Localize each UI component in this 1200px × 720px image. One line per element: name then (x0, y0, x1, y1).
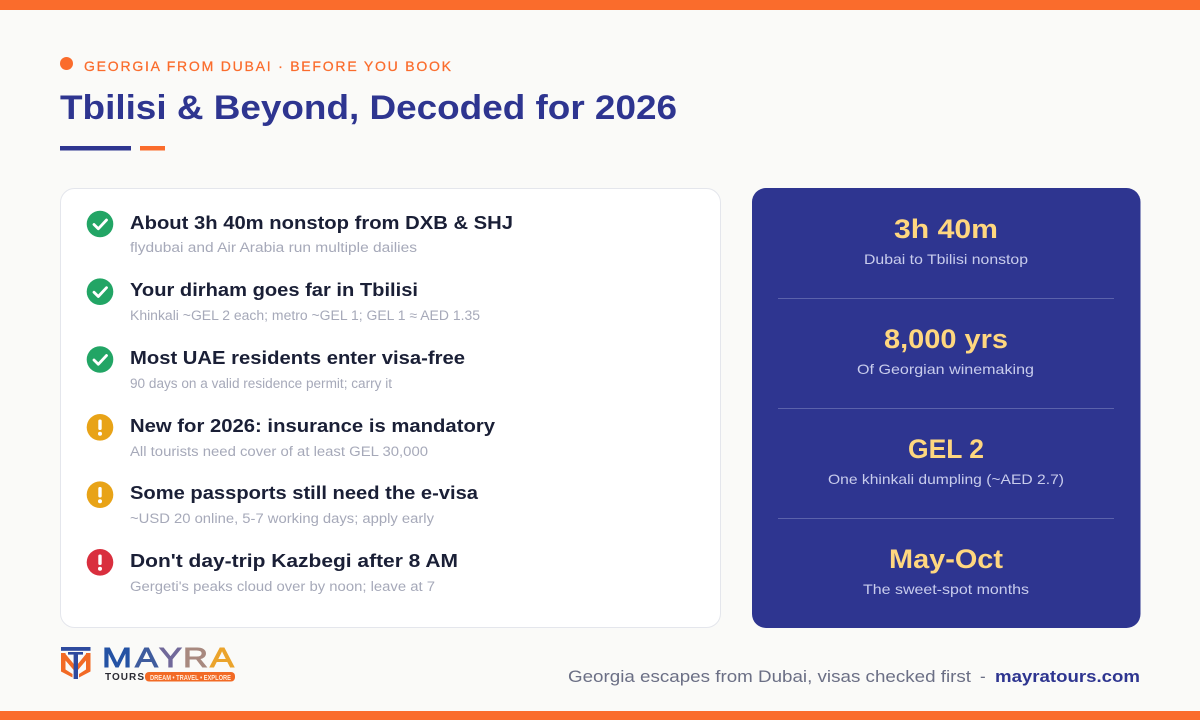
stat: winemaking (857, 324, 1034, 377)
icon: amber warning (87, 481, 113, 508)
logo wordmark: M (102, 642, 132, 673)
footer text: - (980, 667, 986, 686)
stat: best months (863, 544, 1029, 597)
header (60, 57, 677, 150)
footer text (568, 667, 1140, 686)
logo wordmark (102, 642, 234, 673)
item: visa-free: 90 days on a valid residence permit; carry it (130, 376, 392, 391)
item: visa-free (87, 346, 465, 391)
eyebrow dot (60, 57, 73, 70)
stat: flight time: 3h 40m (894, 214, 998, 244)
item: Kazbegi (87, 549, 458, 594)
logo tagline pill: DREAM • TRAVEL • EXPLORE (150, 673, 231, 682)
item: e-visa: Some passports still need the e-visa (130, 482, 479, 503)
item: insurance: All tourists need cover of at least GEL 30,000 (130, 444, 428, 459)
eyebrow text: GEORGIA FROM DUBAI · BEFORE YOU BOOK (84, 58, 452, 74)
stat: winemaking: 8,000 yrs (884, 324, 1008, 354)
title: Tbilisi & Beyond, Decoded for 2026 (60, 89, 677, 127)
stat: khinkali price (828, 434, 1064, 487)
stat: best months: The sweet-spot months (863, 581, 1029, 597)
item: e-visa: ~USD 20 online, 5-7 working days; apply early (130, 511, 434, 526)
stat: flight time: Dubai to Tbilisi nonstop (864, 251, 1028, 267)
footer text: Georgia escapes from Dubai, visas checked first (568, 667, 971, 686)
footer text: mayratours.com (995, 667, 1140, 686)
panel: checklist (60, 188, 720, 628)
stat: khinkali price: One khinkali dumpling (~AED 2.7) (828, 471, 1064, 487)
stat: flight time (864, 214, 1028, 267)
item: flight time: flydubai and Air Arabia run multiple dailies (130, 240, 417, 255)
item: e-visa (87, 481, 479, 526)
logo tours label: TOURS (105, 672, 144, 683)
logo wordmark: A (135, 642, 158, 673)
item: dirham value (87, 278, 480, 323)
bottom accent bar (0, 711, 1200, 720)
icon: green check (87, 346, 113, 373)
logo wordmark: A (210, 642, 234, 673)
icon: green check (87, 211, 113, 237)
item: Kazbegi: Gergeti's peaks cloud over by noon; leave at 7 (130, 579, 435, 594)
logo wordmark: Y (159, 642, 182, 673)
title underline navy (60, 146, 131, 150)
item: visa-free: Most UAE residents enter visa-free (130, 347, 465, 368)
stat: best months: May-Oct (889, 544, 1003, 574)
item: insurance: New for 2026: insurance is mandatory (130, 415, 496, 436)
logo: Mayra Tours (61, 642, 235, 683)
logo wordmark: R (183, 642, 208, 673)
panel: key stats (752, 188, 1140, 628)
icon: red alert (87, 549, 113, 576)
icon: amber warning (87, 414, 113, 441)
item: dirham value: Your dirham goes far in Tbilisi (130, 279, 418, 300)
top accent bar (0, 0, 1200, 10)
panel background (752, 188, 1140, 628)
item: insurance (87, 414, 496, 459)
panel background (60, 188, 720, 628)
item: flight time: About 3h 40m nonstop from DXB & SHJ (130, 212, 513, 233)
logo mark (61, 647, 90, 679)
item: Kazbegi: Don't day-trip Kazbegi after 8 AM (130, 550, 458, 571)
item: dirham value: Khinkali ~GEL 2 each; metro ~GEL 1; GEL 1 ≈ AED 1.35 (130, 308, 480, 323)
icon: green check (87, 278, 113, 305)
stat: winemaking: Of Georgian winemaking (857, 361, 1034, 377)
item: flight time (87, 211, 513, 255)
stat: khinkali price: GEL 2 (908, 434, 984, 464)
title underline orange (140, 146, 165, 150)
